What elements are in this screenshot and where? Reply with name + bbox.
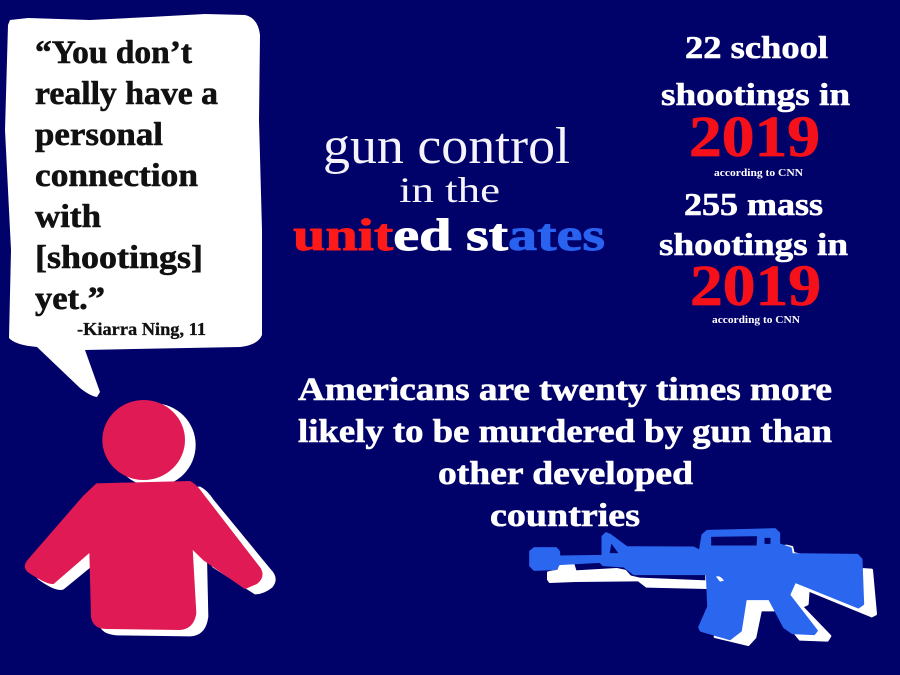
icon: rifle bbox=[530, 529, 876, 645]
quote text: with bbox=[35, 199, 101, 235]
title: in the bbox=[399, 170, 500, 210]
stat: school shootings: 2019 bbox=[689, 104, 820, 169]
stat: school shootings: shootings in bbox=[661, 76, 850, 112]
icon: person shrugging bbox=[25, 400, 275, 635]
statement text: other developed bbox=[438, 456, 693, 492]
quote text: [shootings] bbox=[35, 240, 203, 276]
title: gun control bbox=[323, 118, 570, 175]
stat: mass shootings: 2019 bbox=[690, 253, 821, 318]
quote text: “You don’t bbox=[35, 35, 192, 71]
quote text: yet.” bbox=[35, 281, 105, 317]
quote text: really have a bbox=[35, 76, 218, 112]
quote text bbox=[35, 35, 218, 317]
title bbox=[293, 118, 605, 260]
statement text bbox=[298, 372, 832, 534]
speech bubble bbox=[5, 14, 262, 397]
quote text: personal bbox=[35, 117, 163, 153]
quote text: connection bbox=[35, 158, 198, 194]
statement text: countries bbox=[490, 498, 640, 534]
stat: school shootings: according to CNN bbox=[714, 168, 803, 179]
stat: mass shootings: according to CNN bbox=[712, 315, 800, 326]
stat: mass shootings bbox=[659, 186, 848, 326]
stat: mass shootings: shootings in bbox=[659, 226, 848, 262]
stat: school shootings bbox=[661, 29, 850, 179]
quote attribution: -Kiarra Ning, 11 bbox=[77, 319, 206, 339]
statement text: likely to be murdered by gun than bbox=[298, 414, 832, 450]
title: unit ed st ates bbox=[293, 209, 605, 260]
statement text: Americans are twenty times more bbox=[298, 372, 832, 408]
stat: mass shootings: 255 mass bbox=[684, 186, 823, 222]
stat: school shootings: 22 school bbox=[685, 29, 828, 65]
